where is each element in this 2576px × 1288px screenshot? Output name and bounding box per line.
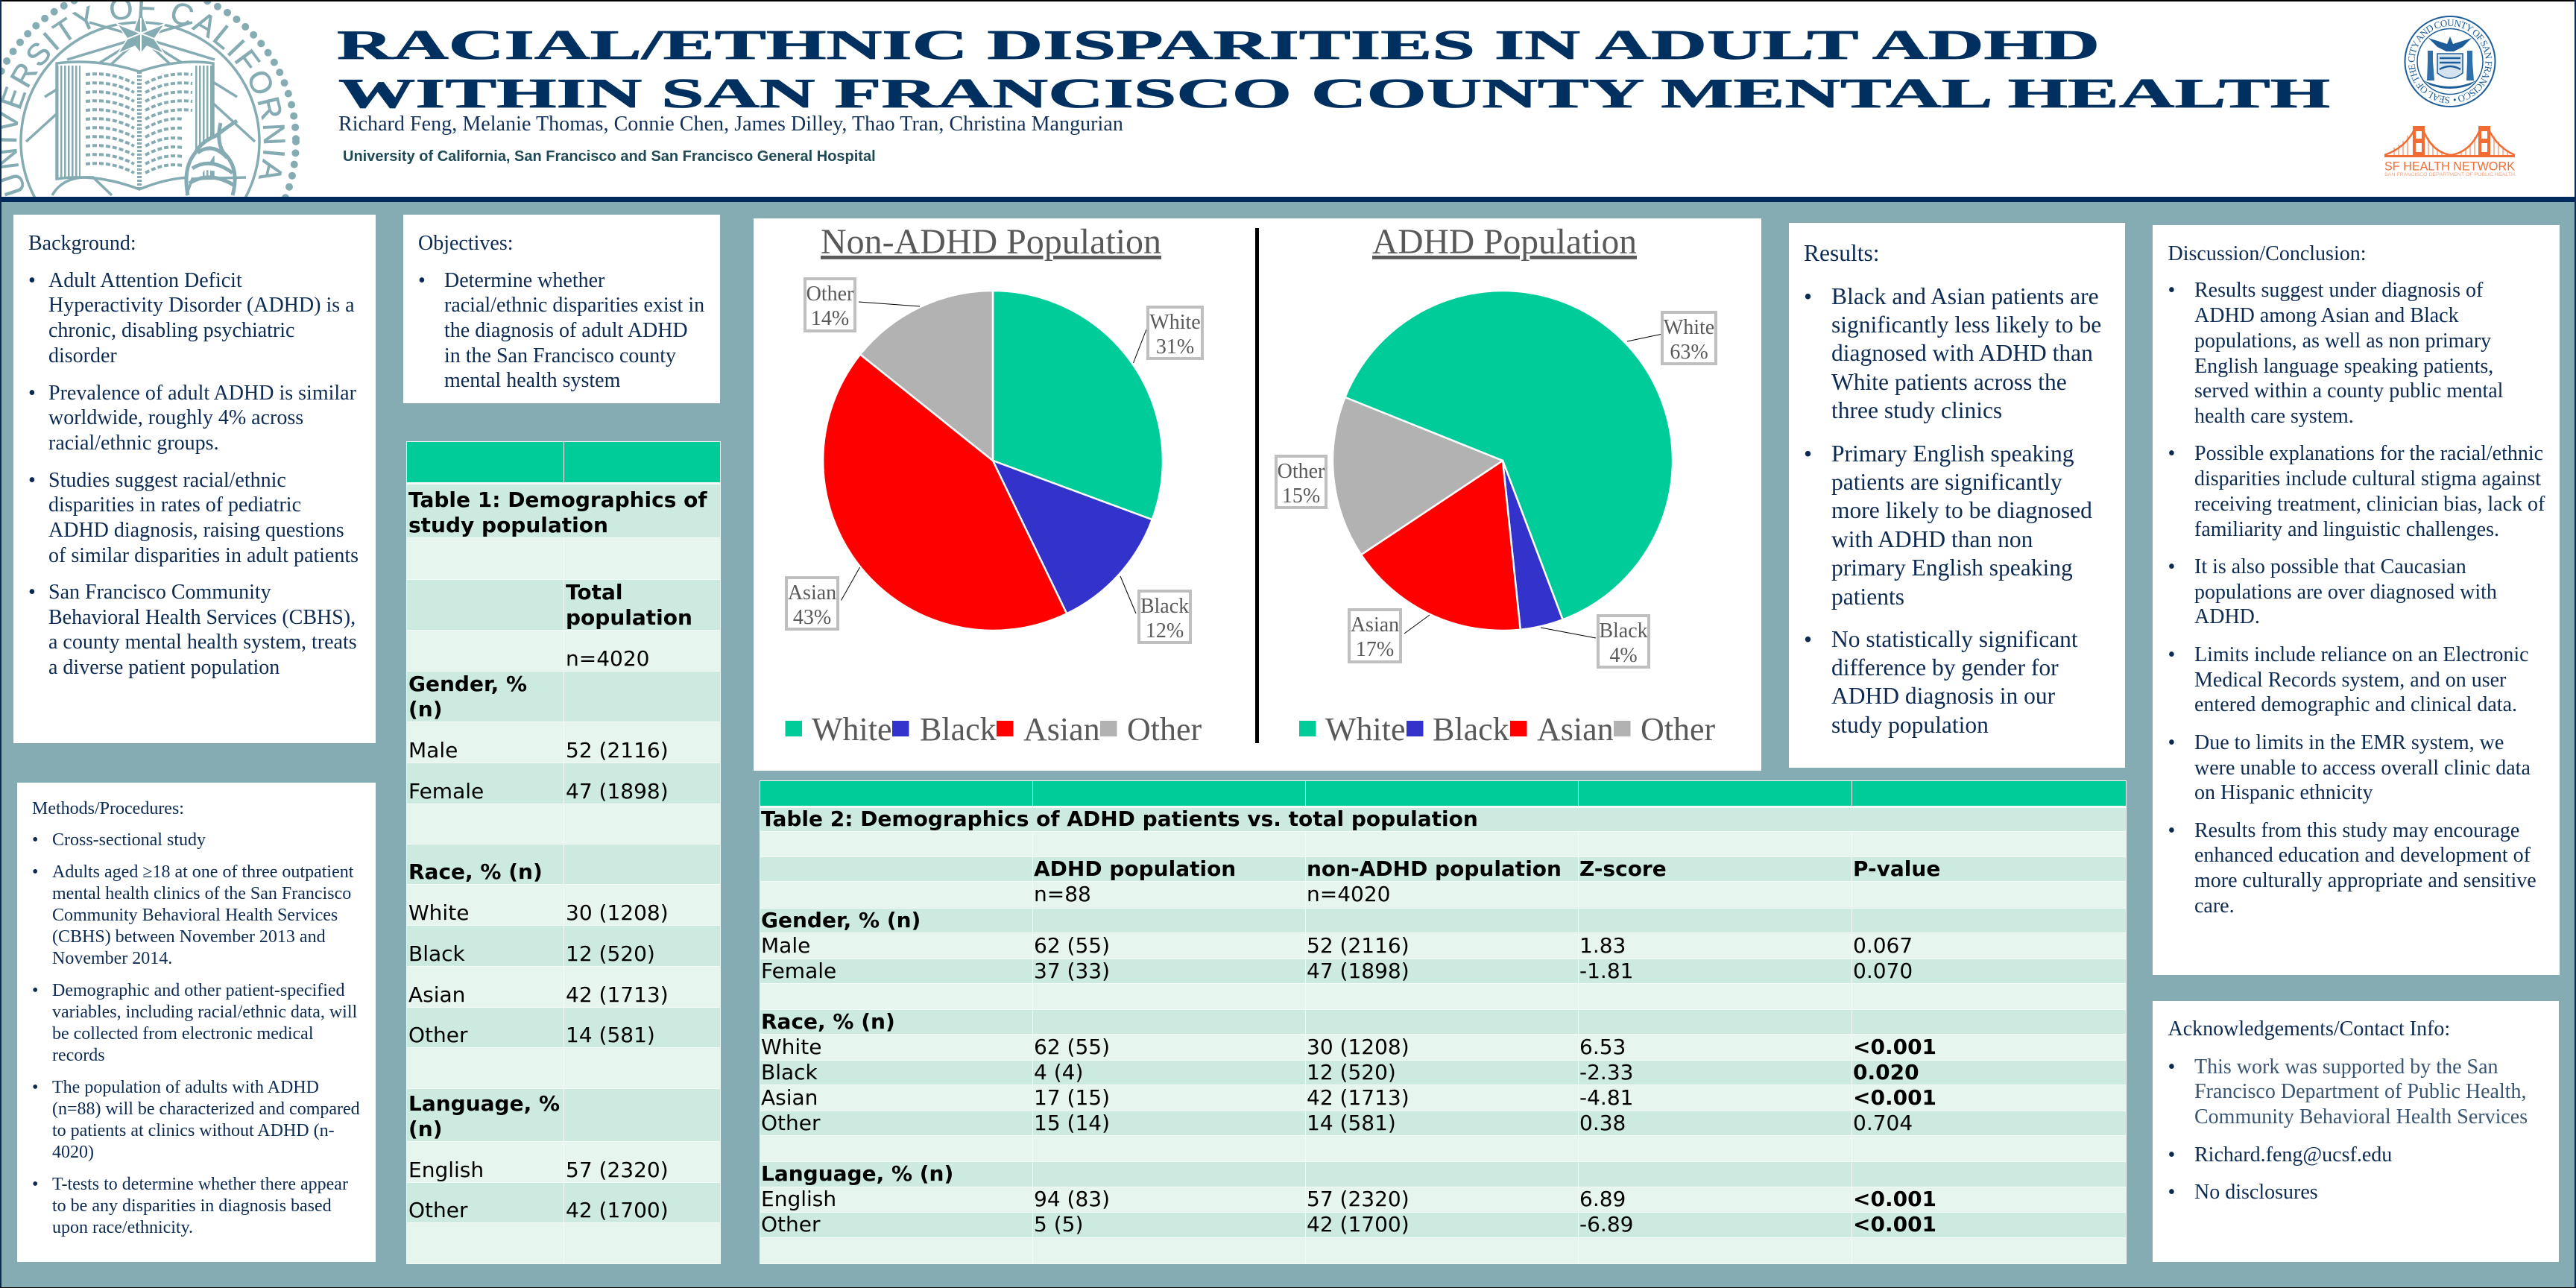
table 2: demographics of ADHD patients vs total population: 47 (1898) [1307,959,1409,982]
text: discussion bullet 1: health care system. [2194,405,2354,428]
label: other 14%: 14% [811,307,849,330]
label: other 15% [1276,456,1326,508]
text: methods bullet 3: Demographic and other patient-specified [52,981,345,1000]
text: funding bullet [2168,1055,2528,1128]
table 2: demographics of ADHD patients vs total population: 30 (1208) [1307,1035,1409,1058]
text: discussion bullet 1: populations, as well as non primary [2194,329,2491,353]
text: background bullet 3: • [28,469,36,492]
label: other 15%: 15% [1282,484,1320,508]
table 2: demographics of ADHD patients vs total population: n=88 [1034,882,1091,906]
text: discussion bullet 3: populations are over diagnosed with [2194,581,2497,604]
table 2: demographics of ADHD patients vs total population: 57 (2320) [1307,1187,1409,1211]
label: asian 43%: 43% [793,606,831,629]
text: background bullet 4: a diverse patient population [48,656,280,679]
heading: acknowledgements: Acknowledgements/Contact Info: [2168,1017,2450,1041]
table 2: demographics of ADHD patients vs total population: -4.81 [1579,1085,1633,1109]
heading: discussion: Discussion/Conclusion: [2168,242,2367,265]
table 1: demographics of study population: Other [408,1023,468,1046]
text: discussion bullet 2 [2168,442,2545,541]
panel: results [1789,223,2125,768]
text: methods bullet 4: 4020) [52,1143,94,1162]
text: discussion bullet 3: ADHD. [2194,605,2260,628]
label: asian 17%: Asian [1351,613,1399,637]
table 2: demographics of ADHD patients vs total population: 0.38 [1579,1111,1626,1134]
table 1: demographics of study population: Black [408,941,465,966]
text: discussion bullet 2: Possible explanations for the racial/ethnic [2194,442,2543,465]
text: methods bullet 2: mental health clinics of the San Francisco [52,884,351,903]
text: discussion bullet 3 [2168,555,2497,628]
label: other 14%: Other [806,282,854,306]
text: objectives bullet: in the San Francisco county [444,344,676,367]
label: asian 43% [786,567,860,629]
label: black 12% [1120,576,1190,643]
table 1: demographics of study population: English [408,1157,484,1182]
panel: background [13,215,376,743]
table 1: demographics of study population: 47 (1898) [566,778,669,804]
text: methods bullet 2: Community Behavioral Health Services [52,906,338,925]
icon: San Francisco city seal: SEAL OF THE CITY AND COUNTY OF SAN FRANCISCO • [2408,19,2493,103]
table 1: demographics of study population: 57 (2320) [566,1157,669,1182]
table 2: demographics of ADHD patients vs total population: 62 (55) [1034,933,1110,957]
text: results bullet 3: • [1804,626,1812,652]
label: black 4%: Black [1599,619,1648,643]
heading: methods: Methods/Procedures: [32,799,184,818]
table 2: demographics of ADHD patients vs total population: 62 (55) [1034,1035,1110,1058]
label: white 31%: White [1149,311,1201,334]
text: funding bullet: This work was supported by the San [2194,1055,2498,1079]
table 2: demographics of ADHD patients vs total population: Table 2: Demographics of ADHD patients vs. total population [761,806,1478,831]
table 1: demographics of study population: Race, % (n) [408,859,543,884]
text: methods bullet 5 [32,1175,348,1237]
text: background bullet 4: a county mental health system, treats [48,631,357,654]
text: background bullet 4: Behavioral Health Services (CBHS), [48,606,356,629]
text: background bullet 3: Studies suggest racial/ethnic [48,469,286,492]
text: background bullet 2: racial/ethnic groups. [48,432,219,455]
pie chart: ADHD population [1333,291,1673,631]
table 1: demographics of study population: Total [566,580,623,604]
text: results bullet 2: patients are significantly [1831,469,2062,495]
table 2: demographics of ADHD patients vs total population: 12 (520) [1307,1060,1396,1084]
text: methods bullet 4: (n=88) will be characterized and compared [52,1099,360,1119]
table 2: demographics of ADHD patients vs total population: White [761,1035,821,1058]
table 2: demographics of ADHD patients vs total population: 0.067 [1853,933,1913,957]
table 2: demographics of ADHD patients vs total population: Female [761,959,836,982]
text: discussion bullet 6: enhanced education and development of [2194,844,2531,867]
table 2: demographics of ADHD patients vs total population: Asian [761,1085,818,1109]
text: methods bullet 5: T-tests to determine whether there appear [52,1175,348,1194]
legend: non-ADHD chart: Black [920,711,997,748]
table 2: demographics of ADHD patients vs total population: 42 (1700) [1307,1212,1409,1237]
table 2: demographics of ADHD patients vs total population: -1.81 [1579,959,1633,982]
text: results bullet 3: ADHD diagnosis in our [1831,683,2055,709]
table 2: demographics of ADHD patients vs total population: 0.704 [1853,1111,1913,1134]
table 1: demographics of study population: 14 (581) [566,1023,655,1046]
title [337,22,2330,116]
text: funding bullet: Francisco Department of Public Health, [2194,1080,2527,1103]
text: discussion bullet 6: more culturally appropriate and sensitive [2194,869,2536,892]
text: discussion bullet 1: English language speaking patients, [2194,355,2493,377]
table 1: demographics of study population: Other [408,1197,468,1222]
authors: Richard Feng, Melanie Thomas, Connie Chen, James Dilley, Thao Tran, Christina Mangurian [338,113,1123,136]
table 2: demographics of ADHD patients vs total population: Race, % (n) [761,1009,895,1033]
text: background bullet 4 [28,581,357,679]
text: methods bullet 4: • [32,1078,38,1097]
panel: pie charts [754,218,1761,771]
header band [0,0,2576,202]
text: methods bullet 2: Adults aged ≥18 at one of three outpatient [52,862,353,882]
text: methods bullet 3: variables, including racial/ethnic data, will [52,1003,357,1022]
table 1: demographics of study population: population [566,605,692,629]
text: discussion bullet 6: • [2168,819,2175,842]
table 1: demographics of study population: n=4020 [566,645,649,671]
label: asian 43%: Asian [788,581,836,604]
text: discussion bullet 5 [2168,731,2531,804]
icon: SF Health Network logo: SAN FRANCISCO DEPARTMENT OF PUBLIC HEALTH [2384,172,2515,177]
heading: background: Background: [28,231,136,255]
text: background bullet 4: • [28,581,36,604]
text: results bullet 2: more likely to be diagnosed [1831,497,2092,523]
text: background bullet 1: Adult Attention Deficit [48,268,242,292]
text: discussion bullet 1: ADHD among Asian and Black [2194,304,2459,327]
label: black 12%: 12% [1146,619,1184,643]
text: background bullet 1 [28,268,355,367]
text: funding bullet: Community Behavioral Health Services [2194,1105,2528,1128]
text: objectives bullet: mental health system [444,369,620,392]
text: methods bullet 5: to be any disparities in diagnosis based [52,1196,332,1215]
table 2: demographics of ADHD patients vs total population: Gender, % (n) [761,908,921,932]
text: contact bullet: • [2168,1143,2175,1167]
text: objectives bullet: • [418,268,426,292]
panel: objectives [403,215,720,403]
table 2: demographics of ADHD patients vs total population: ADHD population [1034,856,1236,881]
table 2: demographics of ADHD patients vs total population: P-value [1853,856,1940,881]
label: black 12%: Black [1140,595,1189,618]
text: methods bullet 1: Cross-sectional study [52,830,206,850]
table 1: demographics of study population: White [408,900,469,924]
table 2: demographics of ADHD patients vs total population: Male [761,933,810,957]
legend: non-ADHD chart: Asian [1023,711,1100,748]
text: discussion bullet 5: on Hispanic ethnicity [2194,781,2373,804]
heading: ADHD population: ADHD Population [1372,222,1637,262]
text: methods bullet 2: • [32,862,38,882]
text: results bullet 3: No statistically significant [1831,626,2078,652]
title: RACIAL/ETHNIC DISPARITIES IN ADULT ADHD [337,22,2100,69]
text: objectives bullet [418,268,704,392]
text: methods bullet 3: be collected from electronic medical [52,1024,313,1044]
text: discussion bullet 4: Limits include reliance on an Electronic [2194,643,2529,666]
table 2: demographics of ADHD patients vs total population: -6.89 [1579,1212,1633,1237]
text: discussion bullet 5: Due to limits in the EMR system, we [2194,731,2504,754]
table 2: demographics of ADHD patients vs total population: 14 (581) [1307,1111,1396,1134]
table 1: demographics of study population: 30 (1208) [566,900,669,924]
text: discussion bullet 2: • [2168,442,2175,465]
text: discussion bullet 4: Medical Records system, and on user [2194,669,2506,692]
table 2: demographics of ADHD patients vs total population: Z-score [1579,856,1667,881]
text: background bullet 1: disorder [48,344,117,367]
table 2: demographics of ADHD patients vs total population: Language, % (n) [761,1161,953,1186]
legend: ADHD chart [1299,711,1716,748]
text: background bullet 2: • [28,382,36,405]
label: white 63% [1627,312,1716,364]
table 2: demographics of ADHD patients vs total population: -2.33 [1579,1060,1633,1084]
text: discussion bullet 5: • [2168,731,2175,754]
text: results bullet 2 [1804,441,2092,610]
table 1: demographics of study population: Male [408,738,458,762]
table 1: demographics of study population: Table 1: Demographics of [408,487,707,512]
table 2: demographics of ADHD patients vs total population: 1.83 [1579,933,1626,957]
heading: results: Results: [1804,240,1880,266]
text: results bullet 2: • [1804,441,1812,467]
pie chart: non-ADHD population [823,291,1163,631]
text: methods bullet 4: to patients at clinics without ADHD (n- [52,1121,335,1140]
table 1: demographics of study population: 42 (1713) [566,982,669,1006]
text: background bullet 3: ADHD diagnosis, raising questions [48,519,344,542]
table 1: demographics of study population [406,441,721,1264]
text: methods bullet 3: records [52,1046,105,1065]
text: discussion bullet 1 [2168,279,2503,428]
text: discussion bullet 2: receiving treatment, clinician bias, lack of [2194,493,2545,516]
label: black 4% [1541,616,1649,667]
table 2: demographics of ADHD patients vs total population: 5 (5) [1034,1212,1083,1237]
text: background bullet 2: Prevalence of adult ADHD is similar [48,382,356,405]
text: disclosures bullet: No disclosures [2194,1181,2318,1204]
table 2: demographics of ADHD patients vs total population: 0.020 [1853,1060,1919,1084]
text: background bullet 1: • [28,268,36,292]
legend: ADHD chart: Asian [1537,711,1614,748]
table 2: demographics of ADHD patients vs total population: <0.001 [1853,1187,1936,1211]
text: results bullet 3 [1804,626,2078,738]
text: results bullet 1: • [1804,283,1812,309]
text: results bullet 2: patients [1831,584,1904,610]
text: methods bullet 2 [32,862,353,968]
text: results bullet 2: primary English speaking [1831,555,2073,581]
table 2: demographics of ADHD patients vs total population: <0.001 [1853,1035,1936,1058]
text: discussion bullet 2: familiarity and linguistic challenges. [2194,518,2499,541]
table 2: demographics of ADHD patients vs total population: Black [761,1060,818,1084]
text: methods bullet 3 [32,981,357,1065]
table 2: demographics of ADHD patients vs total population: 52 (2116) [1307,933,1409,957]
label: white 31%: 31% [1156,335,1194,359]
table 2: demographics of ADHD patients vs total population: non-ADHD population [1307,856,1562,881]
table 2: demographics of ADHD patients vs total population: 17 (15) [1034,1085,1110,1109]
table 2: demographics of ADHD patients vs total population: <0.001 [1853,1085,1936,1109]
text: funding bullet: • [2168,1055,2175,1079]
label: asian 17%: 17% [1356,638,1394,661]
text: results bullet 1: White patients across the [1831,369,2067,395]
text: background bullet 1: Hyperactivity Disorder (ADHD) is a [48,294,355,317]
text: results bullet 2: Primary English speaking [1831,441,2074,467]
text: discussion bullet 1: Results suggest under diagnosis of [2194,279,2483,302]
text: discussion bullet 6 [2168,819,2536,918]
table 2: demographics of ADHD patients vs total population: Other [761,1111,821,1134]
panel: acknowledgements and contact [2153,1001,2559,1262]
text: objectives bullet: Determine whether [444,268,604,292]
text: discussion bullet 5: were unable to access overall clinic data [2194,757,2531,780]
text: discussion bullet 6: care. [2194,894,2235,918]
label: white 63%: White [1664,316,1714,339]
table 2: demographics of ADHD patients vs total population: 94 (83) [1034,1187,1110,1211]
text: discussion bullet 4 [2168,643,2529,716]
text: discussion bullet 1: • [2168,279,2175,302]
text: disclosures bullet: • [2168,1181,2175,1204]
table 1: demographics of study population: 12 (520) [566,941,655,966]
table 1: demographics of study population: 42 (1700) [566,1197,669,1222]
affiliation: University of California, San Francisco and San Francisco General Hospital [343,148,876,165]
table 1: demographics of study population: (n) [408,1117,443,1140]
text: methods bullet 4 [32,1078,360,1162]
text: results bullet 2: with ADHD than non [1831,526,2033,552]
text: discussion bullet 3: It is also possible that Caucasian [2194,555,2466,578]
legend: non-ADHD chart: Other [1127,711,1202,748]
heading: non-ADHD population: Non-ADHD Population [821,222,1161,262]
text: objectives bullet: racial/ethnic disparities exist in [444,294,704,317]
table 1: demographics of study population: Language, % [408,1091,560,1116]
text: discussion bullet 6: Results from this study may encourage [2194,819,2519,842]
legend: ADHD chart: White [1325,711,1406,748]
table 2: demographics of ADHD patients vs total population: 0.070 [1853,959,1913,982]
text: discussion bullet 4: • [2168,643,2175,666]
table 1: demographics of study population: study population [408,513,608,537]
table 2: demographics of ADHD patients vs total population [760,780,2127,1264]
legend: ADHD chart: Black [1433,711,1509,748]
label: white 31% [1133,307,1202,363]
text: background bullet 1: chronic, disabling psychiatric [48,319,294,342]
table 1: demographics of study population: Female [408,778,484,804]
table 1: demographics of study population: Asian [408,982,465,1006]
table 2: demographics of ADHD patients vs total population: 6.89 [1579,1187,1626,1211]
text: discussion bullet 3: • [2168,555,2175,578]
table 1: demographics of study population: Gender, % [408,672,527,696]
text: discussion bullet 2: disparities include cultural stigma against [2194,467,2541,490]
table 2: demographics of ADHD patients vs total population: <0.001 [1853,1212,1936,1237]
text: methods bullet 1: • [32,830,38,850]
text: background bullet 3: of similar disparities in adult patients [48,544,359,567]
label: asian 17% [1349,610,1430,662]
text: background bullet 4: San Francisco Community [48,581,271,604]
table 2: demographics of ADHD patients vs total population: Other [761,1212,821,1237]
text: contact bullet: Richard.feng@ucsf.edu [2194,1143,2392,1167]
label: white 63%: 63% [1670,341,1708,364]
table 2: demographics of ADHD patients vs total population: n=4020 [1307,882,1390,906]
text: methods bullet 3: • [32,981,38,1000]
text: methods bullet 4: The population of adults with ADHD [52,1078,319,1097]
table 1: demographics of study population: (n) [408,696,443,722]
legend: ADHD chart: Other [1641,711,1716,748]
text: objectives bullet: the diagnosis of adult ADHD [444,319,688,342]
label: other 14% [805,279,920,331]
text: background bullet 3 [28,469,359,567]
text: results bullet 1 [1804,283,2101,423]
panel: methods [17,783,376,1262]
text: discussion bullet 4: entered demographic and clinical data. [2194,693,2517,716]
legend: non-ADHD chart [786,711,1202,748]
table 2: demographics of ADHD patients vs total population: 6.53 [1579,1035,1626,1058]
panel: discussion and conclusion [2153,225,2560,975]
text: results bullet 3: difference by gender for [1831,654,2059,681]
table 2: demographics of ADHD patients vs total population: 42 (1713) [1307,1085,1409,1109]
icon: SF Health Network logo: SF HEALTH NETWORK [2384,160,2515,173]
table 2: demographics of ADHD patients vs total population: 4 (4) [1034,1060,1083,1084]
text: methods bullet 2: November 2014. [52,949,172,968]
text: background bullet 3: disparities in rates of pediatric [48,493,301,517]
text: background bullet 2: worldwide, roughly 4% across [48,406,303,429]
label: black 4%: 4% [1609,644,1638,667]
icon: SF Health Network logo [2384,126,2515,177]
divider between charts [1255,228,1259,743]
text: methods bullet 5: upon race/ethnicity. [52,1218,193,1237]
table 2: demographics of ADHD patients vs total population: English [761,1187,836,1211]
heading: objectives: Objectives: [418,231,514,255]
text: discussion bullet 1: served within a county public mental [2194,379,2503,402]
text: results bullet 1: three study clinics [1831,397,2002,423]
text: results bullet 1: diagnosed with ADHD than [1831,340,2093,366]
text: results bullet 1: significantly less likely to be [1831,312,2101,338]
text: methods bullet 5: • [32,1175,38,1194]
text: results bullet 3: study population [1831,712,1989,738]
text: background bullet 2 [28,382,356,455]
table 1: demographics of study population: 52 (2116) [566,738,669,762]
label: other 15%: Other [1278,460,1325,483]
legend: non-ADHD chart: White [812,711,892,748]
table 2: demographics of ADHD patients vs total population: 37 (33) [1034,959,1110,982]
table 2: demographics of ADHD patients vs total population: 15 (14) [1034,1111,1110,1134]
text: results bullet 1: Black and Asian patients are [1831,283,2099,309]
text: methods bullet 2: (CBHS) between November 2013 and [52,927,326,947]
